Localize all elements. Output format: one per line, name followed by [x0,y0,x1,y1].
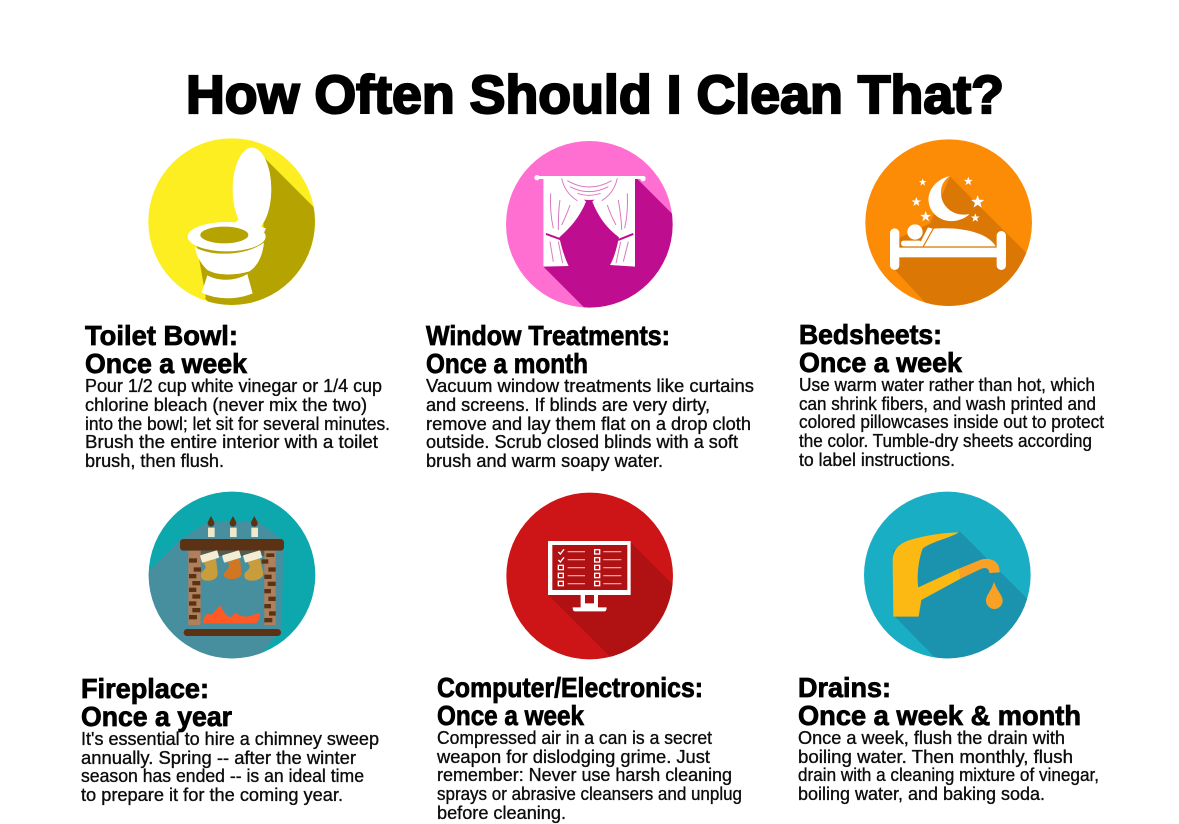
text block: toilet bowl: Brush the entire interior with a toilet [85,432,378,452]
heading: drains: Once a week & month [798,700,1081,731]
text block: drains: Once a week, flush the drain with [798,728,1065,748]
heading: fireplace: Once a year [81,701,232,732]
icon: bed and moon [865,139,1032,306]
icon: curtains [506,141,673,308]
heading: computer and electronics: Computer/Electronics: [437,672,703,703]
icon: faucet [864,492,1031,658]
text block: window treatments [426,376,754,471]
heading: bedsheets: Bedsheets: [799,319,942,350]
text block: fireplace: annually. Spring -- after the winter [81,748,356,768]
text block: window treatments: brush and warm soapy water. [426,451,663,471]
heading: toilet bowl [85,320,247,379]
heading: bedsheets [799,319,962,378]
icon: computer monitor [506,492,673,660]
heading: drains [798,672,1081,731]
panel: computer and electronics [436,493,742,823]
text block: computer and electronics [436,728,742,823]
text block: toilet bowl: Pour 1/2 cup white vinegar or 1/4 cup [85,376,382,396]
text block: toilet bowl: into the bowl; let sit for several minutes. [85,414,390,434]
text block: window treatments: and screens. If blinds are very dirty, [426,395,710,415]
text block: fireplace: to prepare it for the coming year. [81,785,343,805]
icon: fireplace [148,492,316,658]
text block: computer and electronics: weapon for dislodging grime. Just [436,747,710,767]
text block: bedsheets: Use warm water rather than hot, which [799,375,1095,395]
text block: bedsheets: to label instructions. [799,450,955,470]
text block: window treatments: Vacuum window treatments like curtains [426,376,754,396]
panel: drains [798,492,1099,804]
text block: toilet bowl [85,376,390,471]
heading: toilet bowl: Toilet Bowl: [85,320,238,351]
heading: fireplace: Fireplace: [81,673,209,704]
text block: bedsheets: colored pillowcases inside out to protect [799,412,1104,432]
heading: fireplace [81,673,232,732]
text block: drains: drain with a cleaning mixture of vinegar, [798,765,1099,785]
heading: computer and electronics: Once a week [437,700,584,731]
heading: window treatments [426,320,670,379]
text block: window treatments: outside. Scrub closed blinds with a soft [426,432,738,452]
text block: drains: boiling water. Then monthly, flush [798,747,1073,767]
heading: computer and electronics [437,672,703,731]
text block: computer and electronics: Compressed air in a can is a secret [437,728,712,748]
icon: toilet [148,138,315,305]
text block: fireplace: season has ended -- is an ideal time [81,766,364,786]
text block: toilet bowl: brush, then flush. [85,451,224,471]
panel: fireplace [81,492,379,805]
panel: toilet bowl [85,138,390,471]
text block: fireplace [81,729,379,805]
text block: drains: boiling water, and baking soda. [798,784,1045,804]
heading: window treatments: Once a month [426,348,588,379]
text block: drains [798,728,1099,804]
text block: computer and electronics: remember: Never use harsh cleaning [437,765,732,785]
panel: window treatments [426,141,754,471]
text block: bedsheets: the color. Tumble-dry sheets according [799,431,1092,451]
text block: bedsheets [799,375,1104,470]
heading: window treatments: Window Treatments: [426,320,670,351]
text block: fireplace: It's essential to hire a chimney sweep [81,729,379,749]
heading: toilet bowl: Once a week [85,348,247,379]
text block: computer and electronics: sprays or abrasive cleansers and unplug [437,784,742,804]
panel: bedsheets [799,139,1104,470]
text block: computer and electronics: before cleaning. [437,803,566,823]
title: How Often Should I Clean That? [186,65,1004,125]
heading: drains: Drains: [798,672,891,703]
text block: window treatments: remove and lay them flat on a drop cloth [426,414,751,434]
text block: toilet bowl: chlorine bleach (never mix the two) [85,395,367,415]
text block: bedsheets: can shrink fibers, and wash printed and [799,394,1096,414]
heading: bedsheets: Once a week [799,347,962,378]
